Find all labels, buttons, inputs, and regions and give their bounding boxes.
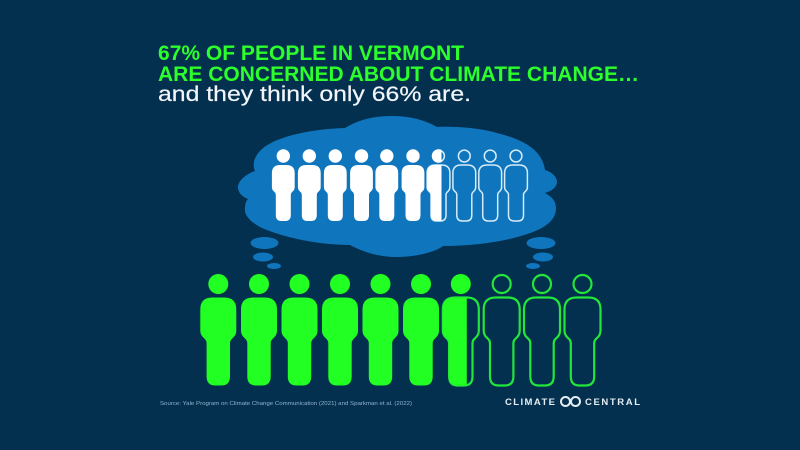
logo: Climate Central: CLIMATE [505,397,555,408]
title [158,42,639,106]
partial green figure [443,274,479,386]
title: and they think only 66% are. [158,82,471,106]
left thought bubbles [250,237,281,269]
icon: linked rings [561,397,580,406]
source note: Source: Yale Program on Climate Change Communication (2021) and Sparkman et al. (2022) [160,401,412,407]
partial white figure [427,149,450,221]
thought cloud [238,116,557,269]
title: ARE CONCERNED ABOUT CLIMATE CHANGE… [158,63,639,86]
logo: Climate Central: CENTRAL [585,397,640,408]
logo: Climate Central [505,397,640,408]
title: 67% OF PEOPLE IN VERMONT [158,42,464,65]
perceived row: white figures in cloud [272,149,527,221]
actual row: green figures [200,274,601,386]
right thought bubbles [526,237,556,269]
